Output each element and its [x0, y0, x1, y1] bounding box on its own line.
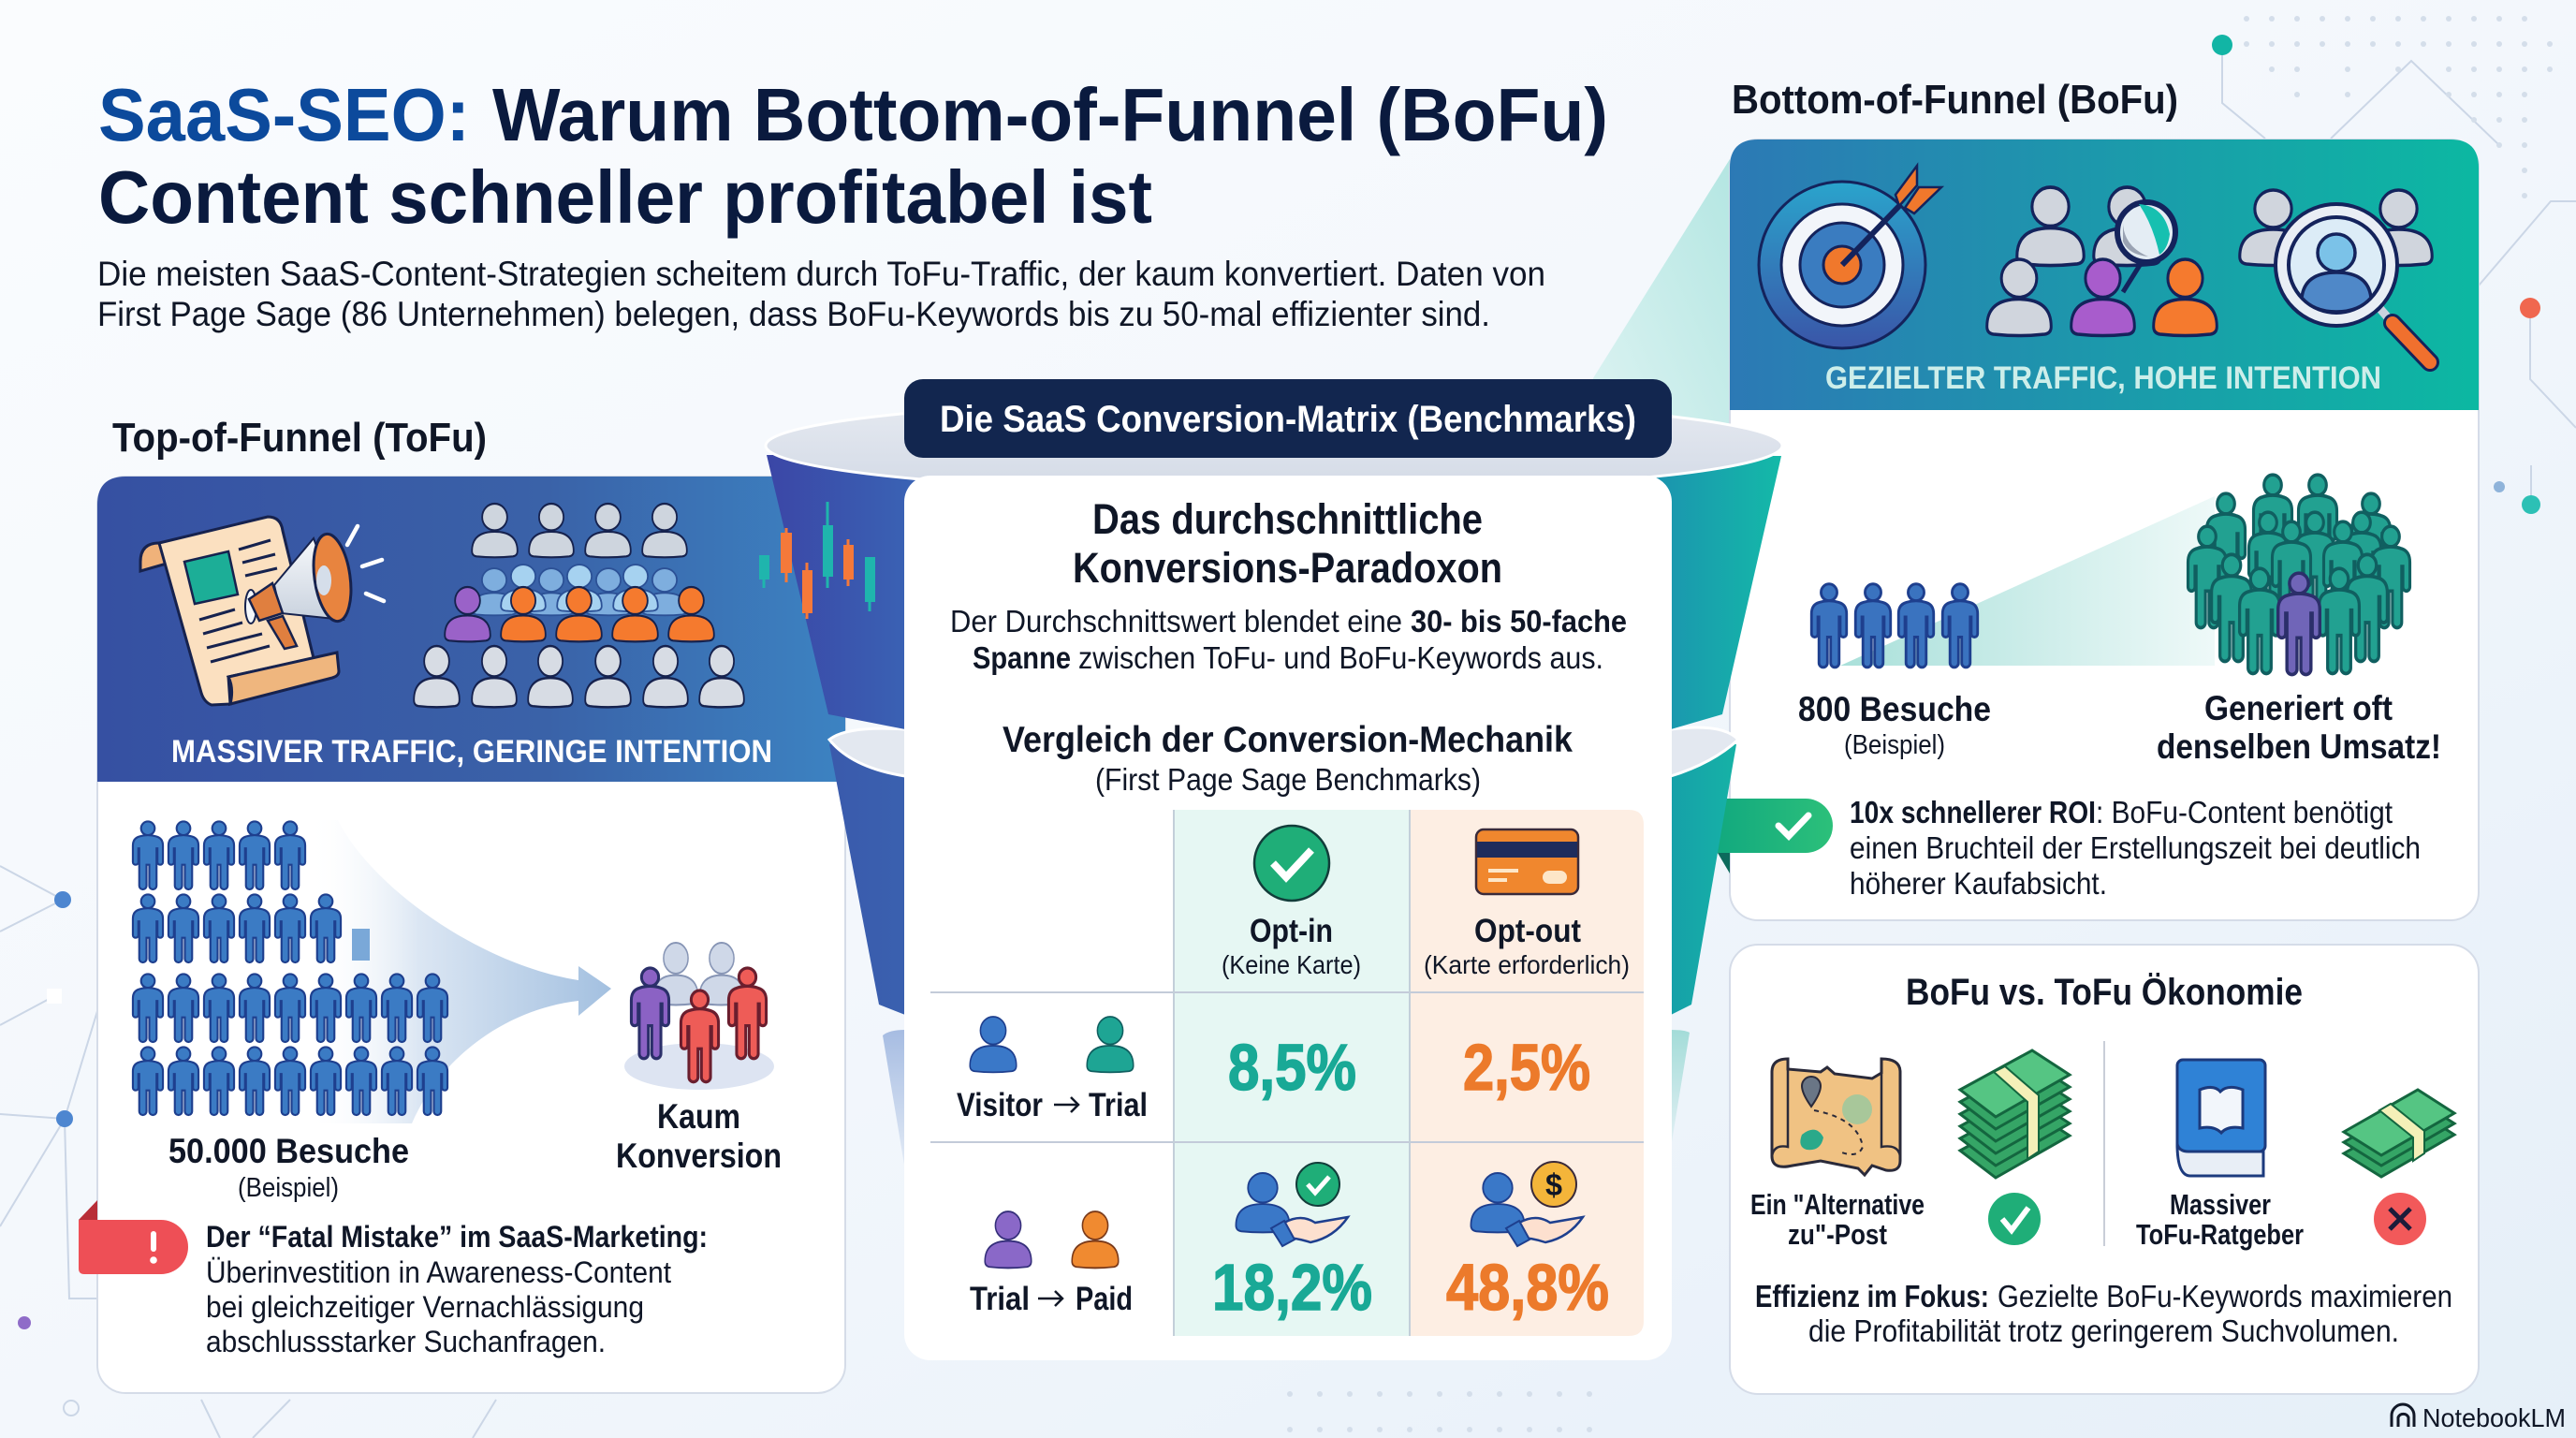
- heading: BoFu: Bottom-of-Funnel (BoFu): [1732, 77, 2178, 123]
- callout text: ROI: höherer Kaufabsicht.: [1850, 866, 2107, 901]
- icon: big money stack: [1960, 1050, 2070, 1178]
- icon: target: [1759, 166, 1941, 348]
- icon: magnifier on person: [2240, 190, 2432, 362]
- callout text: ROI: 10x schnellerer ROI: [1850, 795, 2096, 829]
- panel: conversion matrix: [904, 476, 1672, 1360]
- arrow: traffic narrowing: [262, 820, 611, 1123]
- icon: hand with check: [1236, 1163, 1348, 1246]
- chart: candlesticks: [759, 502, 875, 619]
- icon: cross: [2374, 1193, 2426, 1245]
- ToFu conversion label: [616, 1097, 782, 1175]
- title: [98, 73, 1608, 239]
- BoFu header band: [1730, 139, 2479, 410]
- icon: hand with coin: $: [1545, 1167, 1562, 1202]
- paradox text: Der Durchschnittswert blendet eine: [950, 604, 1402, 638]
- icon: hand with coin: [1471, 1162, 1583, 1246]
- icon: audience crowd: [414, 504, 744, 707]
- paradox heading: Konversions-Paradoxon: [1073, 544, 1502, 592]
- ToFu header band: [97, 477, 845, 782]
- ToFu visitors label: (Beispiel): [238, 1173, 339, 1203]
- intro text: [97, 255, 1545, 333]
- BoFu revenue label: Generiert oft: [2204, 689, 2393, 727]
- BoFu revenue label: denselben Umsatz!: [2157, 727, 2441, 766]
- icon: visitor: [970, 1017, 1017, 1072]
- row label: trial to paid: Trial: [970, 1281, 1030, 1317]
- icon: paid orange: [1072, 1211, 1119, 1268]
- value: 8,5%: 8,5%: [1228, 1031, 1356, 1104]
- column label: opt-out: [1424, 913, 1630, 979]
- value: 18,2%: 18,2%: [1212, 1251, 1372, 1324]
- BoFu revenue label: [2157, 689, 2441, 766]
- title: Content schneller profitabel ist: [98, 155, 1152, 239]
- comparison heading: (First Page Sage Benchmarks): [1095, 762, 1481, 797]
- title: Warum Bottom-of-Funnel (BoFu): [492, 73, 1608, 156]
- icon: credit card: [1476, 829, 1578, 894]
- callout: fatal mistake: bei gleichzeitiger Vernachlässigung: [206, 1290, 644, 1324]
- icon: targeted group: [1987, 187, 2217, 336]
- matrix title bar: Die SaaS Conversion-Matrix (Benchmarks): [940, 399, 1636, 440]
- panel: BoFu vs ToFu economics: [1730, 945, 2479, 1394]
- value: 48,8%: 48,8%: [1446, 1251, 1609, 1324]
- funnel top rim: [766, 399, 1782, 492]
- row label: visitor to trial: Visitor: [957, 1087, 1043, 1123]
- heading: ToFu: Top-of-Funnel (ToFu): [112, 415, 487, 461]
- paradox text: zwischen ToFu- und BoFu-Keywords aus.: [1078, 640, 1603, 675]
- intro text: Die meisten SaaS-Content-Strategien scheitem durch ToFu-Traffic, der kaum konvertiert. Daten von: [97, 255, 1545, 293]
- efficiency text: die Profitabilität trotz geringerem Suchvolumen.: [1808, 1313, 2399, 1348]
- funnel graphic: [766, 399, 1782, 1170]
- economics item labels: ToFu-Ratgeber: [2136, 1218, 2304, 1251]
- icon: 800 visitors: [1811, 584, 1978, 668]
- funnel lower tier: [883, 1030, 1690, 1170]
- icon: book: [2177, 1060, 2265, 1176]
- funnel middle rim: [829, 727, 1738, 776]
- economics item labels: Ein "Alternative: [1750, 1188, 1925, 1221]
- title: SaaS-SEO:: [98, 73, 470, 156]
- callout text: ROI: einen Bruchteil der Erstellungszeit bei deutlich: [1850, 830, 2421, 865]
- callout text: ROI: : BoFu-Content benötigt: [2096, 795, 2393, 829]
- icon: 50.000 visitors crowd: [133, 821, 447, 1115]
- ToFu visitors label: 50.000 Besuche: [168, 1132, 409, 1170]
- icon: large revenue crowd: [2188, 475, 2410, 675]
- efficiency text: Effizienz im Fokus:: [1755, 1279, 1989, 1313]
- icon: check: [1988, 1193, 2041, 1245]
- economics item labels: zu"-Post: [1788, 1218, 1887, 1251]
- panel: ToFu: [79, 477, 845, 1393]
- BoFu visitors label: (Beispiel): [1844, 730, 1945, 760]
- divider: [2103, 1041, 2105, 1246]
- economics item labels: [1750, 1188, 2304, 1251]
- ToFu conversion label: Kaum: [657, 1097, 740, 1136]
- column label: opt-in: (Keine Karte): [1222, 950, 1361, 979]
- comparison table background: [930, 810, 1644, 1336]
- callout text: ROI: [1850, 795, 2421, 901]
- BoFu visitors label: [1798, 690, 1991, 760]
- column label: opt-in: [1222, 913, 1361, 979]
- row label: visitor to trial: Trial: [1089, 1087, 1148, 1123]
- icon: map: [1772, 1059, 1900, 1175]
- paradox heading: Das durchschnittliche: [1092, 495, 1483, 543]
- light beam toward BoFu panel: [1591, 159, 1730, 468]
- ToFu header label: MASSIVER TRAFFIC, GERINGE INTENTION: [171, 734, 772, 770]
- icon: scroll and megaphone: [140, 517, 384, 705]
- watermark: NotebookLM: NotebookLM: [2422, 1403, 2566, 1432]
- callout: fatal mistake: [206, 1220, 708, 1358]
- icon: small money stack: [2344, 1090, 2454, 1177]
- panel: BoFu: [1730, 139, 2479, 920]
- paradox text: [950, 604, 1627, 675]
- icon: warning tag: [79, 1200, 188, 1274]
- column label: opt-out: (Karte erforderlich): [1424, 950, 1630, 979]
- ToFu visitors label: [168, 1132, 409, 1203]
- callout: fatal mistake: Überinvestition in Awareness-Content: [206, 1255, 671, 1289]
- paradox text: 30- bis 50-fache: [1411, 604, 1627, 638]
- matrix title bar: [904, 379, 1672, 458]
- icon: trial teal: [1087, 1017, 1134, 1072]
- callout tag: ROI check: [1708, 799, 1833, 873]
- value: 2,5%: 2,5%: [1463, 1031, 1590, 1104]
- comparison heading: [1003, 720, 1573, 797]
- BoFu visitors label: 800 Besuche: [1798, 690, 1991, 728]
- icon: trial purple: [985, 1211, 1032, 1268]
- row label: trial to paid: [970, 1281, 1133, 1317]
- intro text: First Page Sage (86 Unternehmen) belegen, dass BoFu-Keywords bis zu 50-mal effizienter sind.: [97, 295, 1490, 333]
- row label: trial to paid: Paid: [1076, 1281, 1133, 1317]
- wedge: visits to revenue: [1840, 496, 2215, 666]
- comparison heading: Vergleich der Conversion-Mechanik: [1003, 720, 1573, 760]
- callout: fatal mistake: abschlussstarker Suchanfragen.: [206, 1325, 606, 1358]
- economics item labels: Massiver: [2170, 1188, 2271, 1221]
- icon: opt-in check: [1254, 826, 1329, 901]
- paradox text: Spanne: [973, 640, 1071, 675]
- icon: few conversions group: [624, 943, 774, 1090]
- BoFu header label: GEZIELTER TRAFFIC, HOHE INTENTION: [1825, 360, 2381, 396]
- callout: fatal mistake: Der “Fatal Mistake” im SaaS-Marketing:: [206, 1220, 708, 1254]
- column label: opt-out: Opt-out: [1474, 913, 1581, 949]
- column label: opt-in: Opt-in: [1250, 913, 1333, 949]
- efficiency text: [1755, 1279, 2452, 1348]
- funnel middle tier: [829, 744, 1736, 1015]
- efficiency text: Gezielte BoFu-Keywords maximieren: [1998, 1279, 2452, 1313]
- paradox heading: [1073, 495, 1502, 592]
- funnel top tier: [767, 455, 1781, 729]
- row label: visitor to trial: [957, 1087, 1148, 1123]
- ToFu conversion label: Konversion: [616, 1137, 782, 1175]
- economics heading: BoFu vs. ToFu Ökonomie: [1906, 971, 2303, 1013]
